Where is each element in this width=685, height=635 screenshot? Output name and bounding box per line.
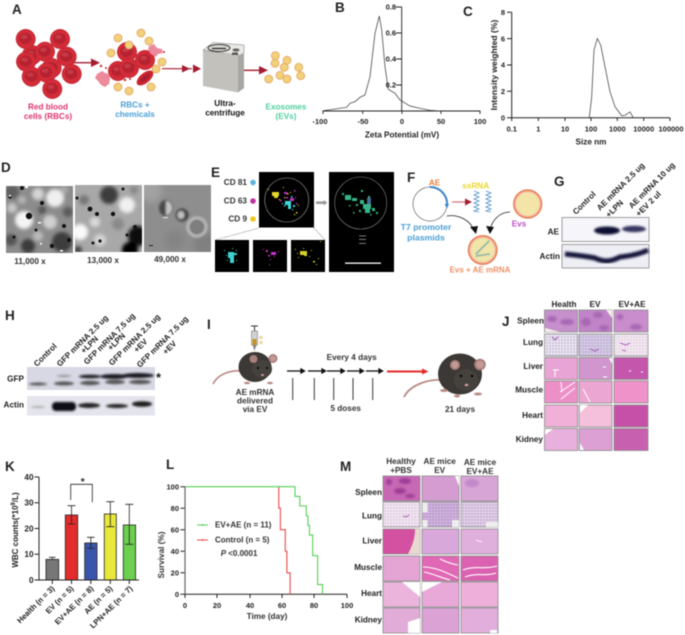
- icon: red blood cells: [16, 29, 81, 99]
- panel E: super-resolution imaging of CD markers: [211, 165, 394, 272]
- row: kidney: [355, 608, 498, 633]
- panel J: histology grid: [502, 300, 648, 450]
- x labels: EV (n = 5): [44, 584, 76, 616]
- panel C: size distribution chart: [463, 4, 684, 146]
- arrow: EV to loaded EV: [486, 212, 510, 234]
- x labels: AE (n = 5): [82, 584, 115, 616]
- icon: ultracentrifuge: [203, 42, 244, 92]
- size x labels: 100000: [658, 124, 684, 134]
- y labels: 0: [175, 590, 179, 599]
- x labels: 100: [341, 601, 353, 610]
- blot AE: [562, 218, 649, 242]
- row: spleen: [517, 310, 648, 332]
- control curve: [279, 487, 290, 594]
- x labels: 0: [183, 601, 187, 610]
- axes: [34, 477, 139, 584]
- y title: /L): [11, 492, 20, 502]
- blot actin: [27, 396, 155, 416]
- label: ultra-centrifuge: Ultra-: [214, 99, 236, 108]
- inset: CD 9 channel: [291, 240, 325, 272]
- dose ticks: [293, 378, 373, 400]
- row: heart: Heart: [522, 411, 543, 420]
- row: liver: [523, 358, 648, 380]
- x labels: 80: [310, 601, 318, 610]
- y labels: 60: [171, 525, 179, 534]
- lane labels: GFP mRNA 7.5 ug: [135, 314, 190, 369]
- error bars: [49, 502, 133, 559]
- lane labels: Control: [32, 342, 59, 368]
- zeta tick labels: 0.2: [386, 80, 396, 90]
- lane labels: GFP mRNA 2.5 ug: [107, 312, 162, 367]
- y labels: 40: [24, 473, 34, 482]
- label AE: AE: [548, 228, 560, 236]
- enlarged particle image: [329, 172, 394, 272]
- arrow: plasmid to loaded EV: [447, 216, 478, 234]
- column headers: EV: [434, 466, 446, 475]
- panel letter B: B: [335, 0, 345, 15]
- y title: WBC counts(*10: [11, 505, 20, 568]
- blot actin: [562, 244, 649, 268]
- label 5 doses: 5 doses: [330, 404, 361, 413]
- row: heart: [361, 582, 498, 607]
- row: muscle: Muscle: [515, 386, 543, 394]
- row: muscle: Muscle: [354, 563, 382, 572]
- size curve: [589, 38, 633, 118]
- row: liver: Liver: [523, 362, 544, 371]
- y labels: 100: [166, 482, 179, 491]
- marker legend: [224, 178, 256, 224]
- arrow head: [324, 200, 328, 205]
- arrow: plasmid to ssRNA: [452, 198, 472, 206]
- zeta x labels: 0: [400, 117, 404, 126]
- zeta axis title: Zeta Potential (mV): [365, 130, 439, 140]
- panel G: AE western blot: [540, 161, 677, 268]
- label ssRNA: ssRNA: [462, 182, 489, 190]
- label EVs: Evs: [512, 220, 527, 228]
- panel letter D: D: [1, 160, 11, 175]
- x labels: EV+AE (n = 8): [53, 584, 96, 627]
- arrow: centrifuge to exosomes: [244, 66, 268, 74]
- marker legend: CD 9: [228, 214, 247, 224]
- axes: [180, 487, 347, 598]
- panel I: mouse dosing timeline: [207, 317, 486, 414]
- zeta tick labels: 0.6: [386, 28, 396, 38]
- EV+AE curve: [185, 487, 322, 594]
- row: liver: Liver: [362, 536, 383, 546]
- label 13,000 x: 13,000 x: [87, 256, 119, 265]
- size y labels: 4: [501, 60, 506, 70]
- icon: empty EV: [513, 189, 542, 219]
- lane labels: AE mRNA 2.5 ug: [595, 161, 646, 212]
- bars: [46, 514, 136, 580]
- label Every 4 days: Every 4 days: [327, 353, 377, 362]
- significance bracket: *: [81, 477, 85, 488]
- x title: Time (day): [247, 612, 288, 621]
- inset: CD 81 channel: [215, 240, 249, 272]
- size axes: [507, 12, 670, 121]
- y labels: 40: [171, 547, 179, 556]
- label T7 promoter plasmids: plasmids: [407, 232, 445, 242]
- label AE mRNA delivered via EV: via EV: [243, 405, 268, 414]
- row: liver: [362, 529, 498, 554]
- column headers: Health: [551, 300, 577, 309]
- label 11,000 x: 11,000 x: [14, 257, 46, 266]
- label 21 days: 21 days: [445, 405, 475, 414]
- label: RBCs + chemicals: RBCs +: [120, 100, 150, 110]
- label 49,000 x: 49,000 x: [154, 255, 186, 264]
- panel letter J: J: [502, 314, 510, 329]
- legend: EV+AE (n = 11): [215, 520, 272, 530]
- panel letter E: E: [211, 165, 220, 180]
- row: muscle: [354, 556, 498, 581]
- blot GFP: [27, 367, 155, 390]
- column headers: EV+AE: [618, 300, 646, 309]
- icon: exosomes: [265, 52, 305, 83]
- row: lung: [362, 502, 498, 527]
- row: spleen: [355, 476, 498, 501]
- row: kidney: Kidney: [355, 616, 382, 624]
- lane labels: +LPN: [106, 331, 127, 352]
- panel letter G: G: [554, 174, 565, 189]
- y title: 9: [11, 501, 17, 505]
- label GFP: GFP: [7, 374, 25, 384]
- lane labels: +LPN: [604, 198, 625, 219]
- lane labels: [32, 311, 190, 369]
- label Actin: Actin: [540, 252, 560, 261]
- arrow: cells to chemicals: [73, 58, 100, 67]
- lane labels: [571, 161, 677, 219]
- label: exosomes: (EVs): [276, 112, 297, 121]
- panel B: zeta potential chart: [312, 0, 486, 140]
- size x labels: 1000: [609, 124, 626, 134]
- icon: EV loaded with mRNA: [468, 235, 498, 265]
- zeta tick labels: 0.8: [386, 2, 396, 12]
- zeta x labels: -100: [312, 117, 328, 126]
- panel A: exosome isolation workflow: [12, 2, 307, 121]
- lane labels: GFP mRNA 2.5 ug: [55, 313, 110, 368]
- panel letter L: L: [166, 457, 174, 472]
- row: muscle: [515, 381, 648, 403]
- icon: syringe: [251, 326, 263, 351]
- label Actin: Actin: [4, 400, 24, 410]
- y title: Survival (%): [157, 531, 166, 578]
- column headers: EV+AE: [466, 467, 494, 476]
- row: heart: [522, 405, 648, 427]
- panel letter F: F: [407, 170, 415, 185]
- row: spleen: Spleen: [355, 488, 382, 497]
- legend: Control (n = 5): [215, 536, 270, 544]
- size y title: Intensity weighted (%): [489, 20, 499, 110]
- row: heart: Heart: [361, 589, 382, 598]
- row: lung: [523, 334, 648, 356]
- row: kidney: Kidney: [516, 435, 543, 444]
- y labels: 20: [171, 568, 179, 577]
- size x title: Size nm: [576, 138, 606, 146]
- label: red blood cells: Red blood: [28, 102, 68, 112]
- composite particle image: [259, 172, 314, 228]
- column headers: [386, 457, 497, 476]
- label: exosomes: Exosomes: [266, 102, 306, 112]
- zeta curve: [323, 16, 440, 111]
- y labels: 10: [24, 550, 34, 559]
- micrograph 49,000x: [143, 184, 212, 253]
- dashed zoom guides: [215, 228, 325, 240]
- x labels: 60: [278, 601, 286, 610]
- label AE mRNA delivered via EV: delivered: [237, 396, 273, 406]
- size x labels: 100: [585, 124, 597, 134]
- icon: treated mouse: [213, 352, 278, 384]
- zeta x labels: 50: [437, 117, 445, 126]
- size x labels: 0.1: [506, 124, 517, 134]
- marker legend: CD 81: [224, 178, 247, 187]
- lane labels: +EV: [132, 337, 150, 354]
- y labels: 20: [24, 524, 34, 534]
- lane labels: GFP mRNA 7.5 ug: [82, 311, 137, 366]
- significance bracket: [71, 477, 92, 502]
- size y labels: 8: [501, 8, 505, 17]
- lane labels: AE mRNA 10 ug: [627, 161, 677, 210]
- label: ultra-centrifuge: centrifuge: [205, 108, 245, 118]
- arrow: chemicals to centrifuge: [162, 64, 201, 73]
- size x labels: 10000: [633, 124, 654, 134]
- panel letter K: K: [5, 459, 15, 474]
- row: spleen: Spleen: [517, 316, 544, 326]
- label EVs + AE mRNA: Evs + AE mRNA: [450, 266, 511, 274]
- arrow: zoom to enlarged particle: [316, 201, 324, 204]
- panel F: mRNA loading schematic: [401, 170, 542, 274]
- arrow: to 21 days: [387, 368, 428, 374]
- label: RBCs + chemicals: chemicals: [115, 110, 155, 119]
- x labels: Health (n = 3): [15, 584, 57, 625]
- zeta x labels: 100: [474, 117, 486, 126]
- lane labels: +EV 2 ul: [634, 190, 663, 218]
- marker legend: CD 63: [224, 196, 247, 206]
- panel letter H: H: [5, 308, 15, 323]
- panel D: electron micrographs: [1, 160, 217, 266]
- icon: RBCs with chemicals: [95, 29, 166, 95]
- panel H: GFP western blot: [4, 308, 190, 416]
- label AE: AE: [429, 178, 441, 188]
- lane labels: Control: [571, 190, 598, 216]
- row: lung: Lung: [362, 512, 382, 520]
- legend: P <0.0001: [221, 549, 258, 558]
- icon: ssRNA strands: [474, 191, 491, 212]
- y labels: 30: [24, 499, 34, 508]
- legend: [197, 520, 272, 558]
- x labels: LPN+AE (n = 7): [88, 584, 135, 630]
- zeta axes: [323, 7, 480, 114]
- label T7 promoter plasmids: T7 promoter: [401, 222, 451, 232]
- zeta tick labels: 0.4: [386, 54, 397, 64]
- size x labels: 10: [561, 124, 569, 134]
- column headers: Healthy: [386, 457, 416, 466]
- inset: CD 63 channel: [253, 240, 287, 272]
- panel letter I: I: [207, 317, 211, 332]
- row: kidney: [516, 428, 648, 450]
- icon: end-point mouse: [404, 354, 486, 398]
- y labels: 80: [171, 504, 179, 513]
- lane labels: +LPN: [79, 334, 100, 355]
- y labels: 0: [29, 576, 34, 585]
- micrograph 13,000x: [74, 184, 143, 253]
- panel L: survival chart: [157, 457, 353, 621]
- column headers: AE mice: [464, 458, 496, 467]
- lane labels: +EV: [161, 339, 179, 356]
- zeta x labels: -50: [358, 117, 368, 126]
- row: lung: Lung: [523, 338, 543, 347]
- label AE mRNA delivered via EV: AE mRNA: [236, 388, 274, 397]
- column headers: AE mice: [424, 457, 456, 466]
- marker asterisk: *: [156, 370, 162, 385]
- label: red blood cells: cells (RBCs): [24, 112, 72, 121]
- dose arrows: [287, 369, 382, 373]
- column headers: EV: [590, 300, 601, 309]
- panel letter A: A: [12, 2, 22, 17]
- size y labels: 2: [501, 87, 505, 96]
- plasmid circle: [413, 187, 449, 221]
- x labels: [15, 584, 135, 630]
- size y labels: 6: [501, 34, 505, 44]
- panel K: WBC bar chart: [5, 459, 139, 630]
- size x labels: 1: [536, 124, 540, 134]
- column headers: +PBS: [390, 466, 412, 475]
- size y labels: 0: [501, 114, 505, 122]
- x labels: 20: [213, 601, 221, 610]
- micrograph 11,000x: [5, 185, 73, 253]
- panel letter C: C: [463, 4, 473, 19]
- panel letter M: M: [340, 459, 351, 474]
- panel M: mouse histology grid: [340, 457, 498, 633]
- x labels: 40: [246, 601, 254, 610]
